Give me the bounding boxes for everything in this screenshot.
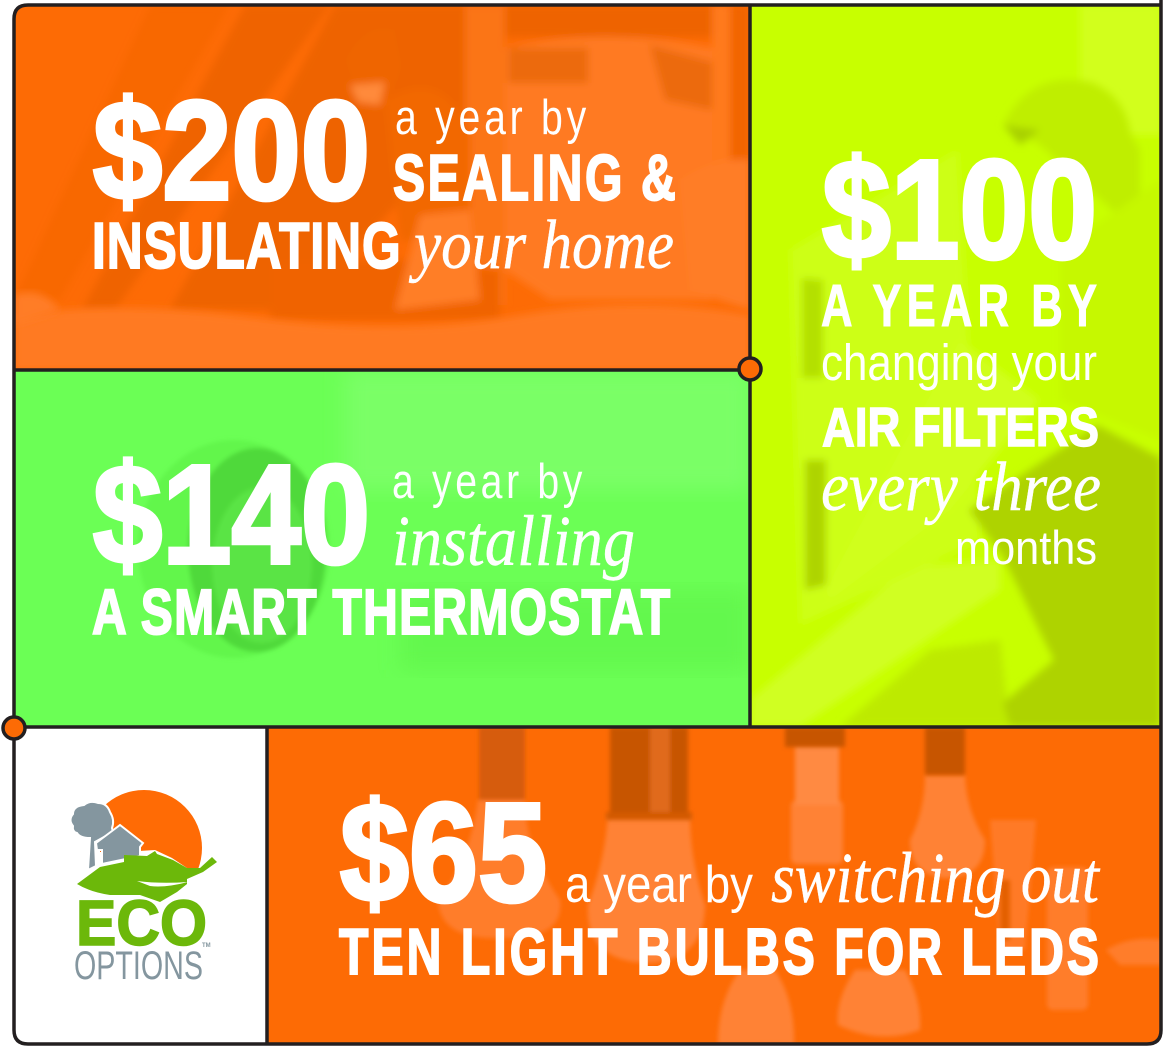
photo: hanging bulbs bbox=[438, 727, 1165, 1044]
text: a year by: a year by bbox=[565, 856, 753, 914]
panel: sealing and insulating bbox=[14, 5, 750, 370]
text: trademark: TM bbox=[202, 943, 211, 949]
text: a smart thermostat: A SMART THERMOSTAT bbox=[92, 576, 670, 648]
text: $100: $100 bbox=[822, 130, 1097, 288]
icon: eco options sun house tree leaf bbox=[70, 790, 217, 988]
text: installing: installing bbox=[392, 501, 635, 581]
text: $65: $65 bbox=[340, 773, 547, 931]
panel: smart thermostat bbox=[14, 370, 750, 727]
text: $140: $140 bbox=[93, 435, 370, 593]
text: switching out: switching out bbox=[771, 838, 1101, 918]
text: a year by: a year by bbox=[392, 455, 583, 509]
text: options: OPTIONS bbox=[74, 944, 203, 988]
node: upper orange dot bbox=[739, 358, 761, 380]
text: $200: $200 bbox=[93, 71, 370, 229]
text: a year by: a year by bbox=[395, 91, 587, 145]
text: a year by: A YEAR BY bbox=[821, 273, 1097, 339]
text: changing your: changing your bbox=[821, 334, 1097, 391]
text: your home: your home bbox=[409, 207, 674, 284]
text: ten light bulbs for leds: TEN LIGHT BULBS FOR LEDS bbox=[339, 916, 1099, 989]
panel: logo bbox=[72, 790, 217, 980]
photo: attic worker bbox=[14, 5, 750, 370]
node: lower orange dot bbox=[3, 717, 25, 739]
text: months: months bbox=[955, 521, 1097, 574]
text: insulating: INSULATING bbox=[92, 211, 401, 283]
text: sealing and: SEALING & bbox=[393, 142, 676, 215]
photo: thermostat bbox=[138, 440, 330, 658]
text: every three: every three bbox=[821, 449, 1101, 526]
panel: air filters bbox=[750, 5, 1161, 727]
photo: technician and filter bbox=[750, 80, 1161, 727]
panel: led bulbs bbox=[267, 727, 1165, 1044]
text: eco: ECO bbox=[76, 887, 207, 959]
text: air filters: AIR FILTERS bbox=[822, 396, 1099, 458]
